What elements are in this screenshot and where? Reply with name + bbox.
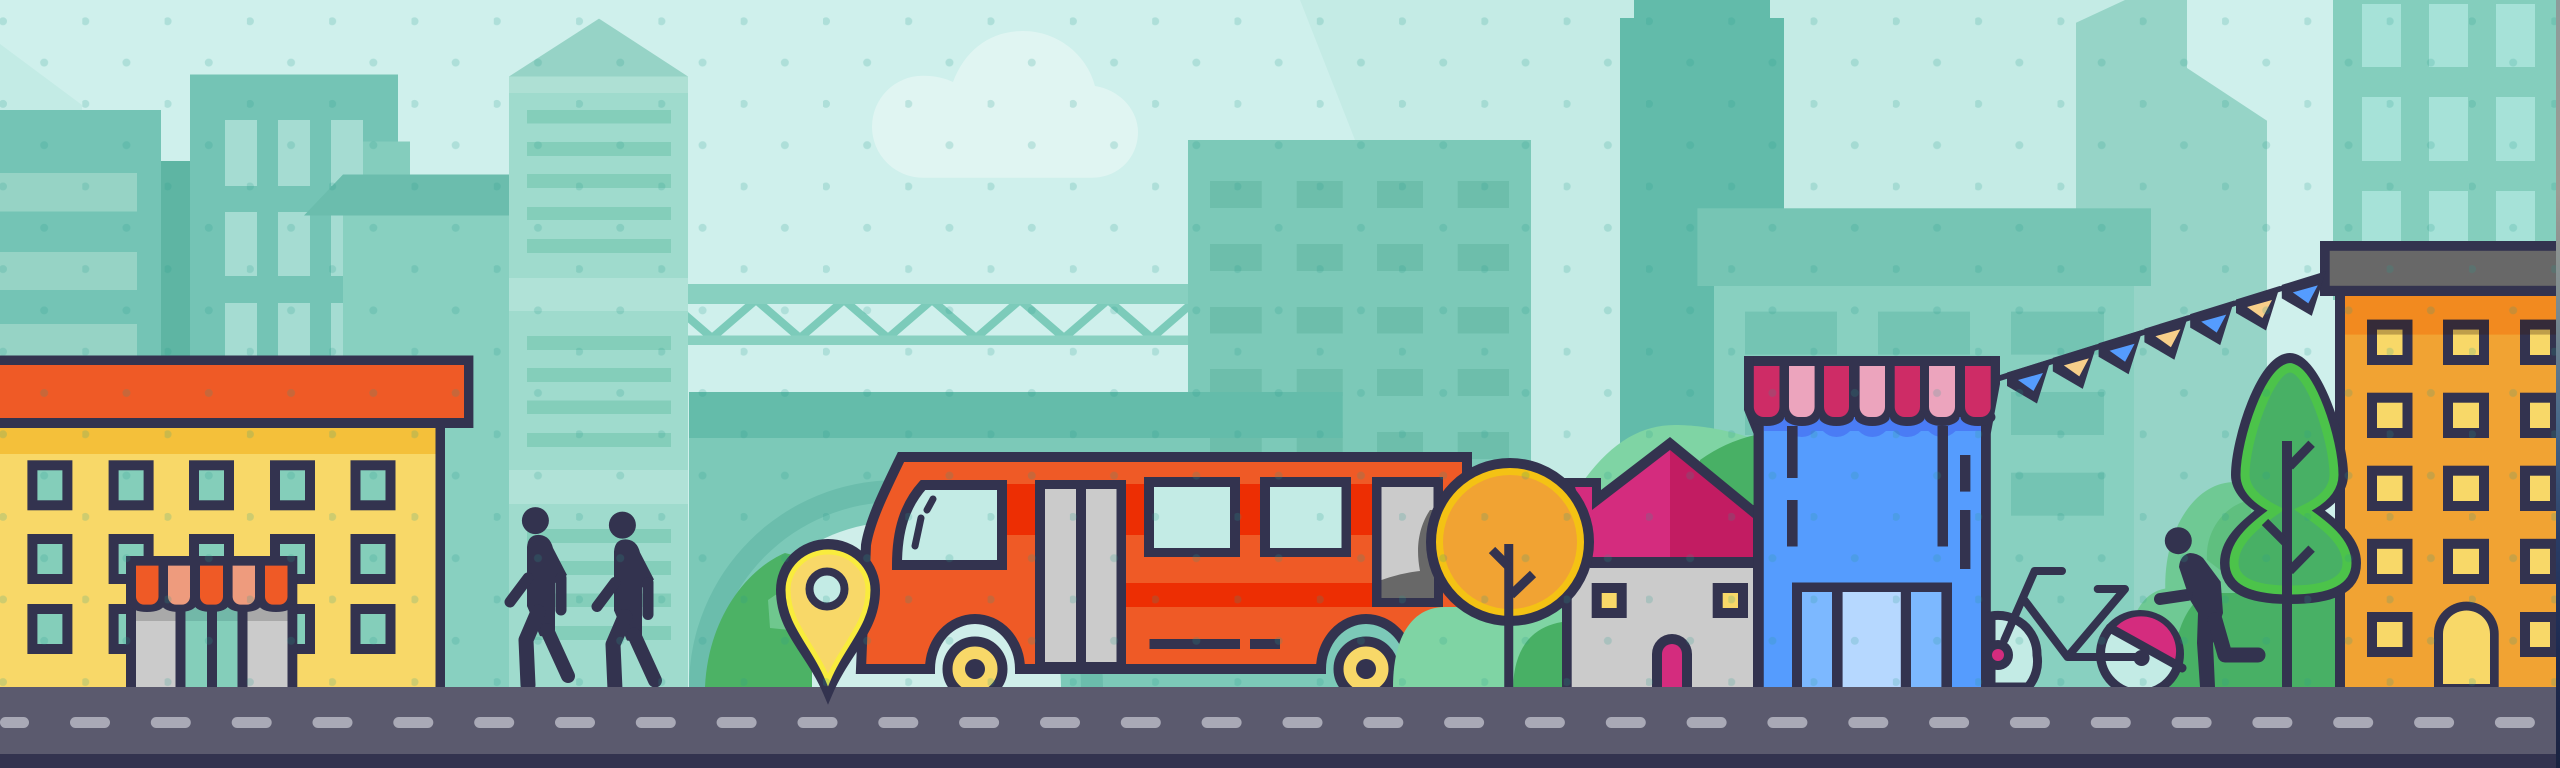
- bridge truss: [668, 284, 1190, 345]
- bicycle: [1983, 571, 2182, 694]
- bushes behind house: [1393, 425, 1755, 687]
- orange round tree: [1431, 463, 1589, 687]
- red bus: [861, 457, 1467, 696]
- background building: tall dark tower: [1620, 0, 1784, 687]
- pedestrian two: [597, 512, 655, 690]
- background building: windowed block: [190, 74, 410, 374]
- background building: left block: [0, 110, 190, 371]
- background building: far right tower: [2333, 0, 2556, 300]
- road: [0, 687, 2560, 768]
- green bushes behind bicycle: [2122, 482, 2336, 687]
- background building: mid block with windows: [1188, 140, 1531, 687]
- background building: pointed tower: [509, 19, 688, 687]
- background building: pitched roof block: [304, 174, 509, 687]
- background building: angled pale tower: [2076, 0, 2267, 687]
- pedestrian one: [510, 507, 568, 685]
- viaduct with arch: [689, 392, 1343, 687]
- bunting flags: [2000, 271, 2326, 404]
- cyclist figure: [2160, 527, 2258, 687]
- green cypress tree: [2225, 358, 2356, 687]
- house: [1562, 437, 1763, 687]
- small shopfront with awning: [126, 556, 297, 687]
- location pin: [781, 544, 875, 692]
- blue shop: [1744, 356, 2000, 687]
- green bush behind pin: [705, 553, 812, 687]
- background building: wide block with cap: [1697, 208, 2151, 687]
- yellow apartment building: [0, 356, 473, 687]
- right edge sliver: [2556, 0, 2560, 768]
- orange apartment building: [2320, 241, 2556, 687]
- cloud: [872, 31, 1138, 178]
